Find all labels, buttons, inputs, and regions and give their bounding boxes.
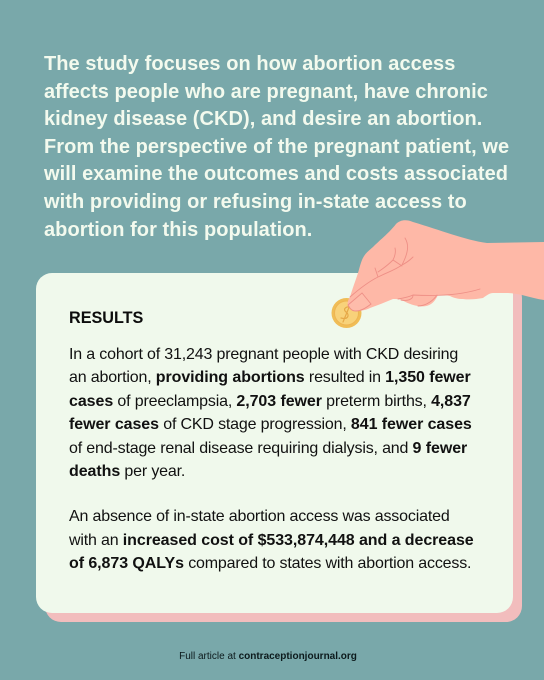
intro text block: abortion for this population. [44, 219, 312, 241]
text block: costs [69, 508, 474, 572]
intro text block: affects people who are pregnant, have chronic [44, 81, 488, 103]
text block: costs: of 6,873 QALYs compared to states with abortion access. [69, 555, 471, 572]
text block: health outcomes: an abortion, providing abortions resulted in 1,350 fewer [69, 369, 471, 386]
panel: results card [36, 273, 513, 613]
text block: health outcomes: fewer cases of CKD stage progression, 841 fewer cases [69, 416, 472, 433]
text block: costs: An absence of in-state abortion access was associated [69, 508, 450, 525]
heading: results: RESULTS [69, 309, 143, 327]
intro text block: will examine the outcomes and costs associated [44, 163, 508, 185]
text block: costs: with an increased cost of $533,874,448 and a decrease [69, 532, 474, 549]
intro text block: The study focuses on how abortion access [44, 53, 455, 75]
footer: source link: Full article at contraceptionjournal.org [179, 651, 357, 662]
intro text block [44, 53, 509, 241]
text block: health outcomes [69, 346, 472, 480]
intro text block: kidney disease (CKD), and desire an abortion. [44, 108, 482, 130]
text block: health outcomes: cases of preeclampsia, 2,703 fewer preterm births, 4,837 [69, 393, 471, 410]
text block: health outcomes: of end-stage renal disease requiring dialysis, and 9 fewer [69, 440, 467, 457]
icon: gold coin [332, 298, 362, 328]
panel shadow [45, 282, 522, 622]
intro text block: From the perspective of the pregnant patient, we [44, 136, 509, 158]
text block: health outcomes: deaths per year. [69, 463, 185, 480]
icon: hand [348, 220, 544, 311]
text block: health outcomes: In a cohort of 31,243 pregnant people with CKD desiring [69, 346, 458, 363]
intro text block: with providing or refusing in-state access to [44, 191, 467, 213]
